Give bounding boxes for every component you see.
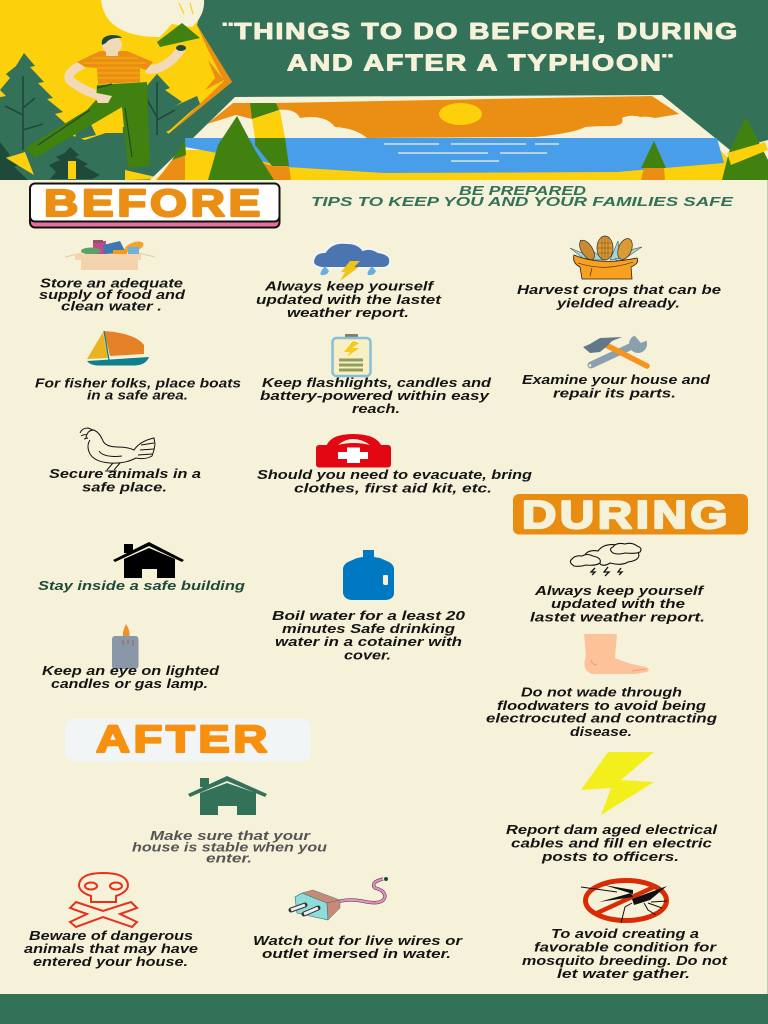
green title panel [140,0,768,180]
tip: during weather report: lastet weather report. [530,611,705,625]
heading: before: BEFORE [44,183,264,225]
icon: sack of corn [570,236,642,279]
speech bubble [101,0,204,37]
tip: flashlights: battery-powered within easy [260,389,490,403]
icon: sailboat [87,331,149,366]
orange burst edge [167,25,232,135]
tip: during weather report: updated with the [551,597,685,611]
subtitle: BE PREPARED [459,184,586,198]
heading: after [65,719,311,762]
tip: electrical cables [506,752,718,864]
tip: stable house: enter. [206,852,252,866]
tip: dangerous animals: Beware of dangerous [29,929,193,943]
tip: mosquito breeding: favorable condition for [534,941,718,955]
tip: food supply: supply of food and [39,288,185,302]
tip: boil water: water in a cotainer with [275,635,462,649]
icon: food box [65,239,155,270]
forest [0,53,200,180]
tip: live wires [253,877,464,961]
tip: dangerous animals [24,873,198,969]
tip: electrical cables: cables and fill en electric [511,837,712,851]
tip: live wires: Watch out for live wires or [253,934,464,948]
tip: during weather report [530,543,705,625]
tip: evacuate: clothes, first aid kit, etc. [294,482,492,496]
tip: repair house: repair its parts. [553,387,676,401]
icon: water jug [343,550,394,600]
person [6,23,200,180]
tip: harvest crops: Harvest crops that can be [517,283,721,297]
icon: black house [113,542,184,578]
tip: animals [49,428,201,495]
tip: stay inside: Stay inside a safe building [38,579,245,593]
tip: boats: For fisher folks, place boats [35,377,241,391]
tip: evacuate: Should you need to evacuate, bring [257,468,532,482]
tip: weather report [256,243,442,320]
icon: chicken [80,428,155,471]
tip: electrical cables: Report dam aged electrical [506,823,718,837]
tip: during weather report: Always keep yourself [534,584,705,598]
icon: skull and crossbones [70,873,137,927]
tip: boil water: cover. [344,648,391,662]
tip: weather report: Always keep yourself [264,280,435,294]
icon: candle [112,624,138,669]
tip: floodwaters [486,634,717,739]
tip: candles: candles or gas lamp. [51,677,208,691]
footer band [0,994,768,1024]
icon: first aid kit [316,434,391,468]
tip: boil water: Boil water for a least 20 [272,609,465,623]
tip: mosquito breeding: To avoid creating a [551,927,699,941]
tip: electrical cables: posts to officers. [541,850,679,864]
tip: stable house: house is stable when you [132,841,327,855]
tip: repair house [522,334,710,401]
tip: animals: safe place. [82,481,167,495]
tip: boats: in a safe area. [87,389,188,403]
icon: plug [291,877,388,920]
icon: no mosquito [581,880,667,923]
subtitle: TIPS TO KEEP YOU AND YOUR FAMILIES SAFE [311,195,734,209]
tip: animals: Secure animals in a [49,467,201,481]
icon: green house [188,776,267,815]
tip: floodwaters: Do not wade through [521,686,682,700]
heading: during: DURING [522,494,731,537]
tip: flashlights: Keep flashlights, candles and [262,376,491,390]
tip: mosquito breeding: mosquito breeding. Do not [522,954,728,968]
tip: boats [35,331,241,403]
tip: harvest crops [517,236,721,311]
tip: floodwaters: disease. [570,725,632,739]
tip: evacuate [257,434,532,496]
tip: flashlights [260,334,491,416]
icon: hammer and wrench [583,334,652,367]
tip: weather report: weather report. [287,306,409,320]
tip: mosquito breeding [522,880,728,981]
landscape scene [150,95,768,180]
tip: harvest crops: yielded already. [556,297,680,311]
header illustration [0,0,768,180]
tip: stable house [132,776,327,866]
tip: weather report: updated with the lastet [256,293,442,307]
icon: cloud outline [570,543,641,576]
tip: live wires: outlet imersed in water. [262,947,451,961]
tip: flashlights: reach. [352,402,400,416]
title [223,18,739,76]
icon: foot [584,634,649,674]
heading: before [30,183,280,228]
tip: candles: Keep an eye on lighted [42,664,219,678]
tip: food supply: clean water . [61,299,162,313]
tip: stable house: Make sure that your [150,829,312,843]
tip: stay inside [38,542,245,593]
tip: floodwaters: floodwaters to avoid being [497,699,706,713]
tip: dangerous animals: animals that may have [24,942,198,956]
tip: boil water: minutes Safe drinking [282,622,455,636]
subtitle [311,184,734,209]
tip: food supply [39,239,185,313]
tip: candles [42,624,219,691]
tip: repair house: Examine your house and [522,373,710,387]
tip: floodwaters: electrocuted and contracting [486,712,717,726]
tip: food supply: Store an adequate [40,276,183,290]
tip: mosquito breeding: let water gather. [557,967,690,981]
tip: boil water [272,550,465,662]
icon: storm cloud [313,243,390,281]
title: AND AFTER A TYPHOON¨ [287,50,674,76]
title: ¨THINGS TO DO BEFORE, DURING [223,18,739,44]
icon: lightning bolt [581,752,654,815]
icon: battery [332,334,370,376]
heading: after: AFTER [96,719,271,761]
tip: dangerous animals: entered your house. [33,955,188,969]
